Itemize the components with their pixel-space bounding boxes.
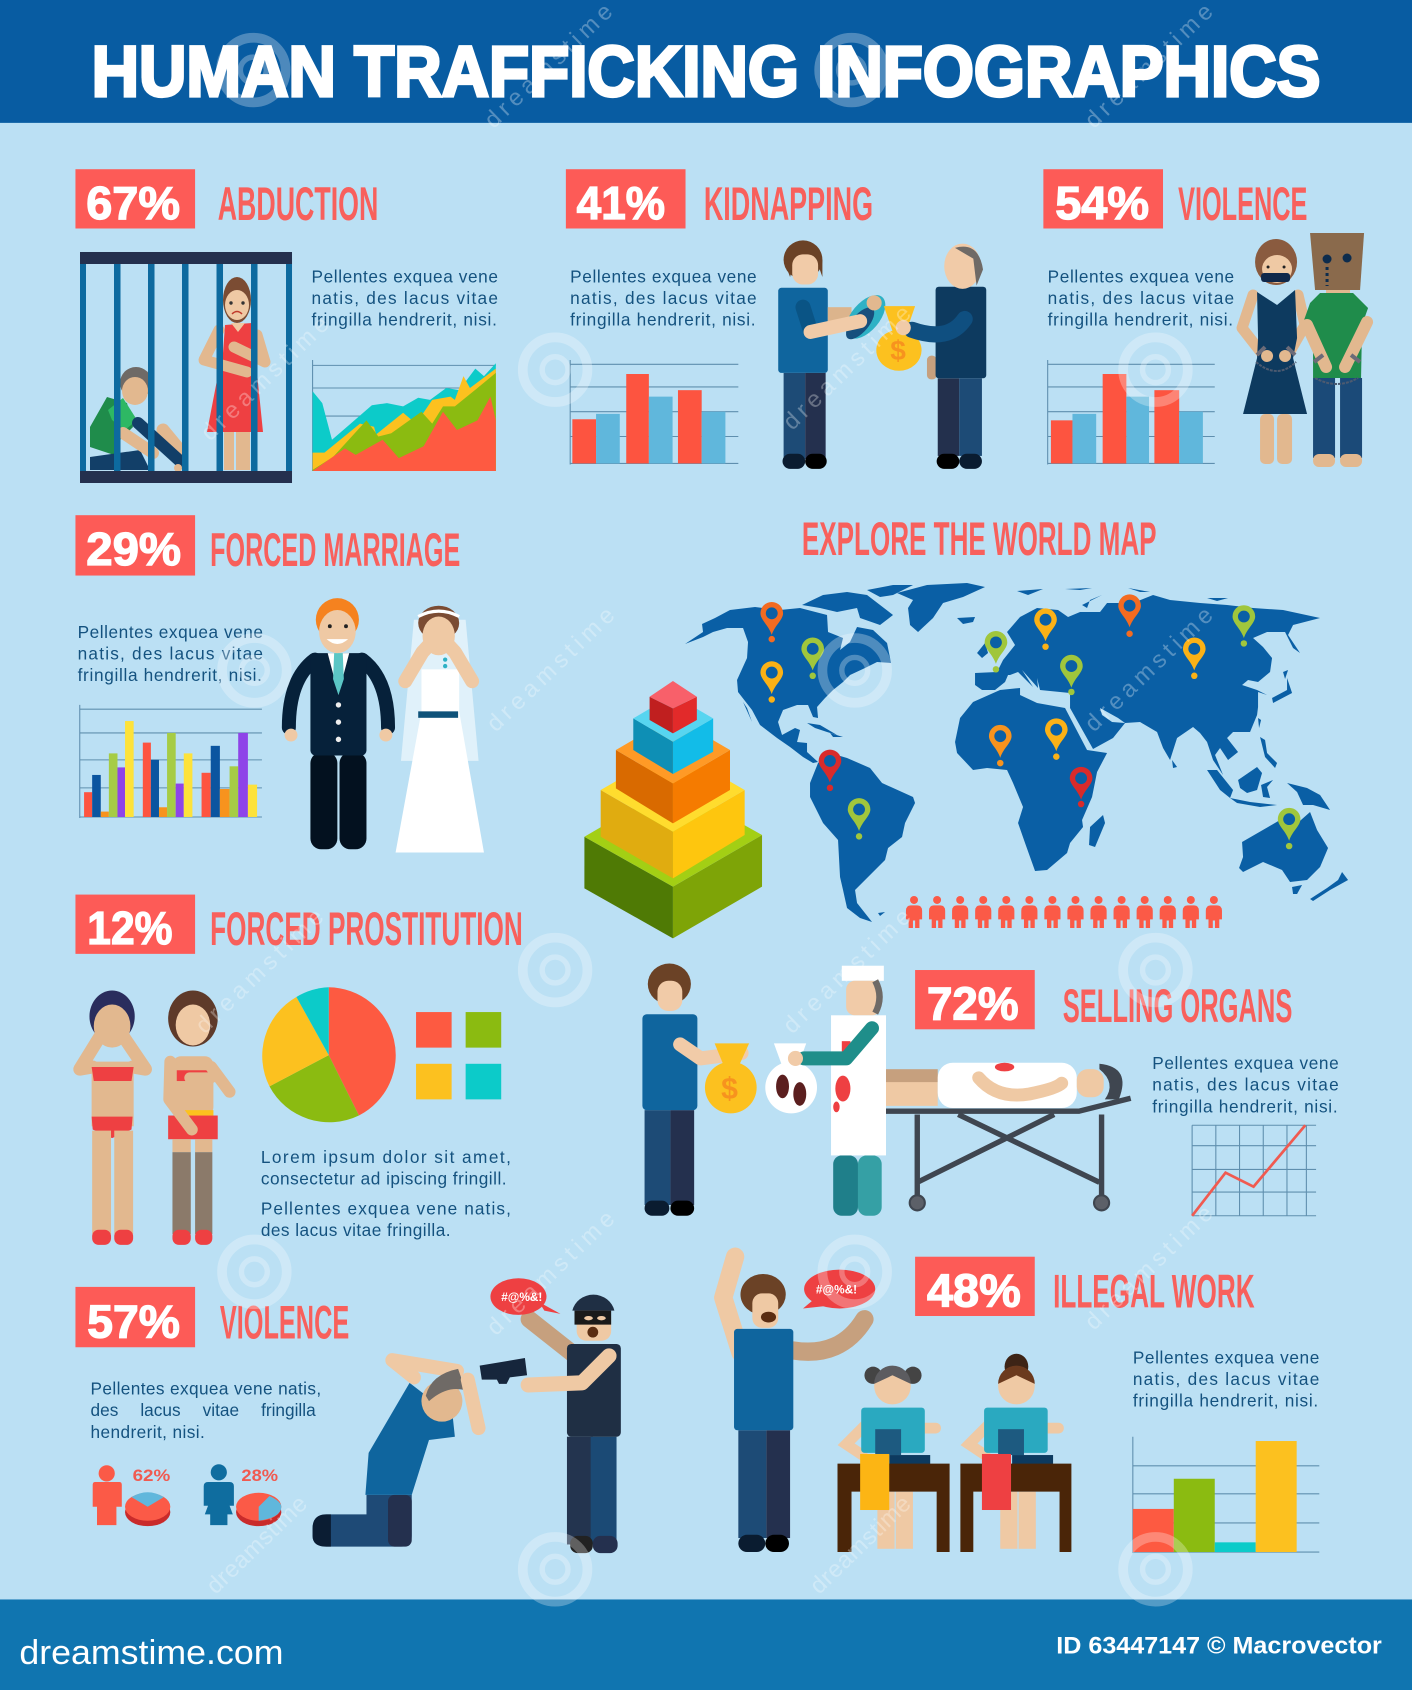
badge: 57% xyxy=(75,1287,195,1348)
text block: des lacus vitae fringilla xyxy=(91,1400,316,1420)
world map continents xyxy=(685,583,1348,922)
title: HUMAN TRAFFICKING INFOGRAPHICS xyxy=(92,33,1320,112)
bar chart xyxy=(1133,1437,1319,1553)
heading: forced prostitution: FORCED PROSTITUTION xyxy=(210,903,523,956)
badge: 72%: 72% xyxy=(927,978,1019,1030)
panel: forced marriage xyxy=(75,515,484,853)
heading: forced marriage: FORCED MARRIAGE xyxy=(210,524,460,577)
multi-series bar chart xyxy=(80,705,262,818)
panel: forced prostitution xyxy=(75,895,523,1245)
badge: 29%: 29% xyxy=(86,523,181,575)
heading: abduction: ABDUCTION xyxy=(218,178,378,231)
text block: Lorem ipsum dolor sit amet, xyxy=(261,1147,511,1167)
text block: des lacus vitae fringilla. xyxy=(261,1220,451,1240)
text block: fringilla hendrerit, nisi. xyxy=(312,309,497,329)
text block xyxy=(570,266,757,329)
illustration: shouting boss: #@%&! xyxy=(816,1282,857,1296)
watermark overlay: dreamstime xyxy=(482,1206,620,1341)
badge: 12% xyxy=(75,895,195,954)
illustration: shouting boss xyxy=(723,1257,875,1552)
badge: 54% xyxy=(1043,169,1163,229)
text block: Pellentes exquea vene xyxy=(1133,1347,1319,1367)
text block xyxy=(1152,1053,1339,1116)
pie chart xyxy=(262,987,396,1122)
text block: natis, des lacus vitae xyxy=(1048,288,1234,308)
watermark overlay: dreamstime xyxy=(1080,1201,1218,1335)
text block: fringilla hendrerit, nisi. xyxy=(1152,1096,1338,1116)
text block: consectetur ad ipiscing fringill. xyxy=(261,1169,507,1189)
text block: fringilla hendrerit, nisi. xyxy=(1048,309,1233,329)
female statistic 28%: 28% xyxy=(241,1467,278,1485)
area chart xyxy=(313,360,496,471)
watermark overlay xyxy=(191,0,1218,1602)
watermark overlay: dreamstime xyxy=(202,1491,313,1599)
badge: 57%: 57% xyxy=(87,1296,180,1348)
text block: natis, des lacus vitae xyxy=(570,288,757,308)
illustration: bound captives xyxy=(1242,233,1368,467)
illustration: organ sale: $ xyxy=(721,1072,738,1105)
illustration: baby sold for money xyxy=(778,240,986,469)
watermark overlay: dreamstime xyxy=(1080,602,1218,737)
footer brand: dreamstime.com xyxy=(19,1634,283,1672)
watermark overlay: dreamstime xyxy=(480,0,618,134)
illustration: baby sold for money: $ xyxy=(890,335,906,366)
text block: natis, des lacus vitae xyxy=(1152,1075,1339,1095)
isometric pyramid xyxy=(584,681,762,938)
panel: abduction xyxy=(75,169,498,483)
panel: violence top xyxy=(1043,169,1368,467)
female statistic 28% xyxy=(204,1464,281,1526)
text block xyxy=(1048,266,1234,329)
badge: 72% xyxy=(915,970,1035,1030)
panel: kidnapping xyxy=(566,169,986,469)
text block: Pellentes exquea vene xyxy=(312,266,498,286)
row of people icons xyxy=(906,896,1222,928)
text block: natis, des lacus vitae xyxy=(1133,1369,1319,1389)
badge: 48%: 48% xyxy=(927,1264,1021,1316)
heading: illegal work: ILLEGAL WORK xyxy=(1053,1265,1255,1318)
watermark overlay: dreamstime xyxy=(805,1491,916,1599)
map pins xyxy=(760,594,1300,849)
badge: 67%: 67% xyxy=(86,177,180,229)
badge: 41% xyxy=(566,169,686,229)
badge: 12%: 12% xyxy=(87,902,172,954)
text block: natis, des lacus vitae xyxy=(312,288,498,308)
male statistic 62%: 62% xyxy=(133,1467,170,1485)
text block: fringilla hendrerit, nisi. xyxy=(78,665,262,685)
text block xyxy=(78,622,263,685)
text block: Pellentes exquea vene xyxy=(1152,1053,1339,1073)
heading: violence: VIOLENCE xyxy=(220,1297,349,1350)
text block: Pellentes exquea vene xyxy=(1048,266,1234,286)
text block xyxy=(261,1147,511,1240)
panel: selling organs xyxy=(642,964,1339,1216)
illustration: two women xyxy=(80,991,230,1245)
illustration: gunman and kneeling man: #@%&! xyxy=(501,1290,542,1304)
illustration: caged captives xyxy=(80,252,292,483)
footer image id: ID 63447147 © Macrovector xyxy=(1056,1633,1382,1659)
bar chart xyxy=(570,360,738,465)
heading: kidnapping: KIDNAPPING xyxy=(704,178,873,231)
text block: fringilla hendrerit, nisi. xyxy=(570,309,756,329)
text block: Pellentes exquea vene xyxy=(78,622,263,642)
watermark overlay: dreamstime xyxy=(482,602,620,737)
text block: hendrerit, nisi. xyxy=(91,1422,205,1442)
panel: world map xyxy=(584,513,1348,938)
badge: 67% xyxy=(75,169,195,229)
badge: 54%: 54% xyxy=(1055,177,1149,229)
watermark overlay: dreamstime xyxy=(1080,0,1218,134)
text block: Pellentes exquea vene natis, xyxy=(91,1379,321,1399)
footer band xyxy=(0,1599,1412,1690)
illustration: groom and crying bride xyxy=(285,598,484,853)
header band xyxy=(0,0,1412,123)
text block xyxy=(91,1379,321,1442)
male statistic 62% xyxy=(93,1465,170,1526)
badge: 29% xyxy=(75,515,195,576)
illustration: sewing workers xyxy=(837,1354,1071,1552)
badge: 48% xyxy=(915,1257,1035,1316)
legend squares xyxy=(416,1012,501,1099)
illustration: organ sale xyxy=(642,964,1131,1216)
illustration: gunman and kneeling man xyxy=(313,1278,621,1553)
badge: 41%: 41% xyxy=(577,177,665,229)
text block: natis, des lacus vitae xyxy=(78,644,263,664)
watermark overlay: dreamstime xyxy=(191,904,329,1039)
watermark overlay: dreamstime xyxy=(778,904,917,1039)
watermark overlay: dreamstime xyxy=(196,311,335,446)
text block: Pellentes exquea vene xyxy=(570,266,757,286)
watermark overlay: dreamstime xyxy=(778,301,917,435)
panel: illegal work xyxy=(723,1257,1319,1553)
text block xyxy=(1133,1347,1319,1411)
bar chart xyxy=(1048,360,1215,465)
text block: Pellentes exquea vene natis, xyxy=(261,1199,511,1219)
text block: fringilla hendrerit, nisi. xyxy=(1133,1391,1318,1411)
text block xyxy=(312,266,498,329)
panel: violence bottom xyxy=(75,1278,621,1553)
line chart xyxy=(1192,1125,1316,1216)
